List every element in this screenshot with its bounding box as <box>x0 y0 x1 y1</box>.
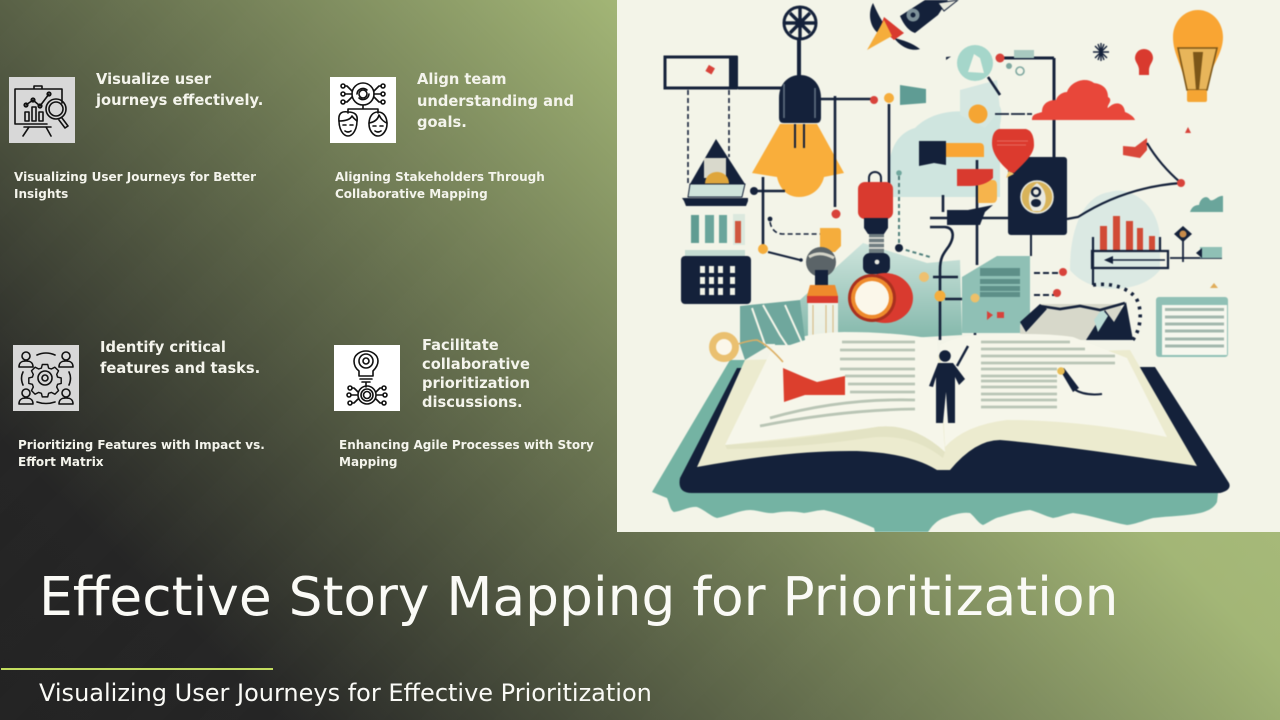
text: enhancing agile: Mapping <box>339 455 397 469</box>
text: prioritizing features: Effort Matrix <box>18 455 104 469</box>
icon: gear surrounded by four people <box>13 345 79 411</box>
figure with raised stick <box>929 346 968 423</box>
teal screen <box>1156 283 1228 357</box>
heading: visualize user journeys: Visualize user <box>96 71 211 88</box>
red shield <box>992 129 1034 178</box>
orange block and glass beacon <box>806 228 841 353</box>
connectors, centre <box>930 58 1060 340</box>
navy device with gold dial <box>1008 157 1067 235</box>
text: aligning stakeholders: Collaborative Mapping <box>335 187 488 201</box>
panel: identify critical features <box>13 339 265 469</box>
heading: visualize user journeys <box>96 71 263 109</box>
text: visualizing user journeys <box>14 170 256 201</box>
text: prioritizing features: Prioritizing Features with Impact vs. <box>18 438 265 452</box>
navy book cover <box>680 367 1230 493</box>
text lines on the pages <box>760 342 1115 426</box>
cream under-pages <box>697 350 1197 470</box>
teal document <box>919 256 1067 333</box>
pen <box>1057 367 1102 394</box>
teal base of the book <box>652 360 1218 540</box>
heading: facilitate discussions: collaborative <box>422 356 530 373</box>
box with dashed hangers <box>665 57 785 185</box>
panel: facilitate discussions <box>334 337 594 469</box>
orange pendant lamp <box>752 75 844 197</box>
heading: identify critical features: Identify critical <box>100 339 226 356</box>
red cloud <box>1032 80 1135 120</box>
title: Effective Story Mapping for Prioritization <box>39 565 1118 628</box>
text: enhancing agile <box>339 438 594 469</box>
icon: presentation board with magnifier <box>9 77 75 143</box>
text: prioritizing features <box>18 438 265 469</box>
red bow <box>783 368 845 402</box>
orange bar, red tag <box>919 141 997 203</box>
teal medallion and line <box>946 45 1034 128</box>
heading: align team: understanding and <box>417 92 574 110</box>
red lantern with big lens <box>848 172 913 323</box>
right page <box>940 334 1167 447</box>
heading: facilitate discussions: prioritization <box>422 375 530 392</box>
heading: align team: goals. <box>417 114 467 131</box>
wires and nodes, upper left <box>754 96 930 260</box>
teal bar chart and keypad <box>681 214 751 304</box>
red bird and curve <box>1067 127 1223 219</box>
heading: facilitate discussions <box>422 337 530 411</box>
mountains <box>1020 302 1133 340</box>
heading: facilitate discussions: discussions. <box>422 394 523 411</box>
red bar chart <box>1092 216 1222 341</box>
text: visualizing user journeys: Visualizing User Journeys for Better <box>14 170 256 184</box>
film wheel <box>784 7 816 78</box>
star <box>1093 43 1109 61</box>
heading: identify critical features: features and tasks. <box>100 360 260 377</box>
plug <box>947 205 993 225</box>
heading: align team <box>417 71 574 131</box>
triangle building <box>682 139 748 206</box>
icon: two people sharing a network node <box>330 77 396 143</box>
rocket <box>867 0 958 50</box>
big orange bulb <box>1173 10 1223 102</box>
heading: visualize user journeys: journeys effectively. <box>96 92 263 109</box>
panel: visualize user journeys <box>9 71 263 201</box>
text: enhancing agile: Enhancing Agile Processes with Story <box>339 438 594 452</box>
backdrop: pale teal clouds <box>780 105 1160 345</box>
heading: facilitate discussions: Facilitate <box>422 337 499 354</box>
left page <box>725 332 945 452</box>
subtitle: Visualizing User Journeys for Effective Prioritization <box>39 679 652 707</box>
text: aligning stakeholders <box>335 170 545 201</box>
text: visualizing user journeys: Insights <box>14 187 68 201</box>
panel: align team <box>330 71 574 201</box>
heading: align team: Align team <box>417 71 507 88</box>
icon: light bulb gear with network <box>334 345 400 411</box>
small red bulb <box>1135 49 1153 75</box>
teal shards and sun badge <box>709 300 805 362</box>
text: aligning stakeholders: Aligning Stakeholders Through <box>335 170 545 184</box>
accent line <box>1 668 273 670</box>
heading: identify critical features <box>100 339 260 377</box>
illustration: open book with connected ideas <box>617 0 1280 532</box>
